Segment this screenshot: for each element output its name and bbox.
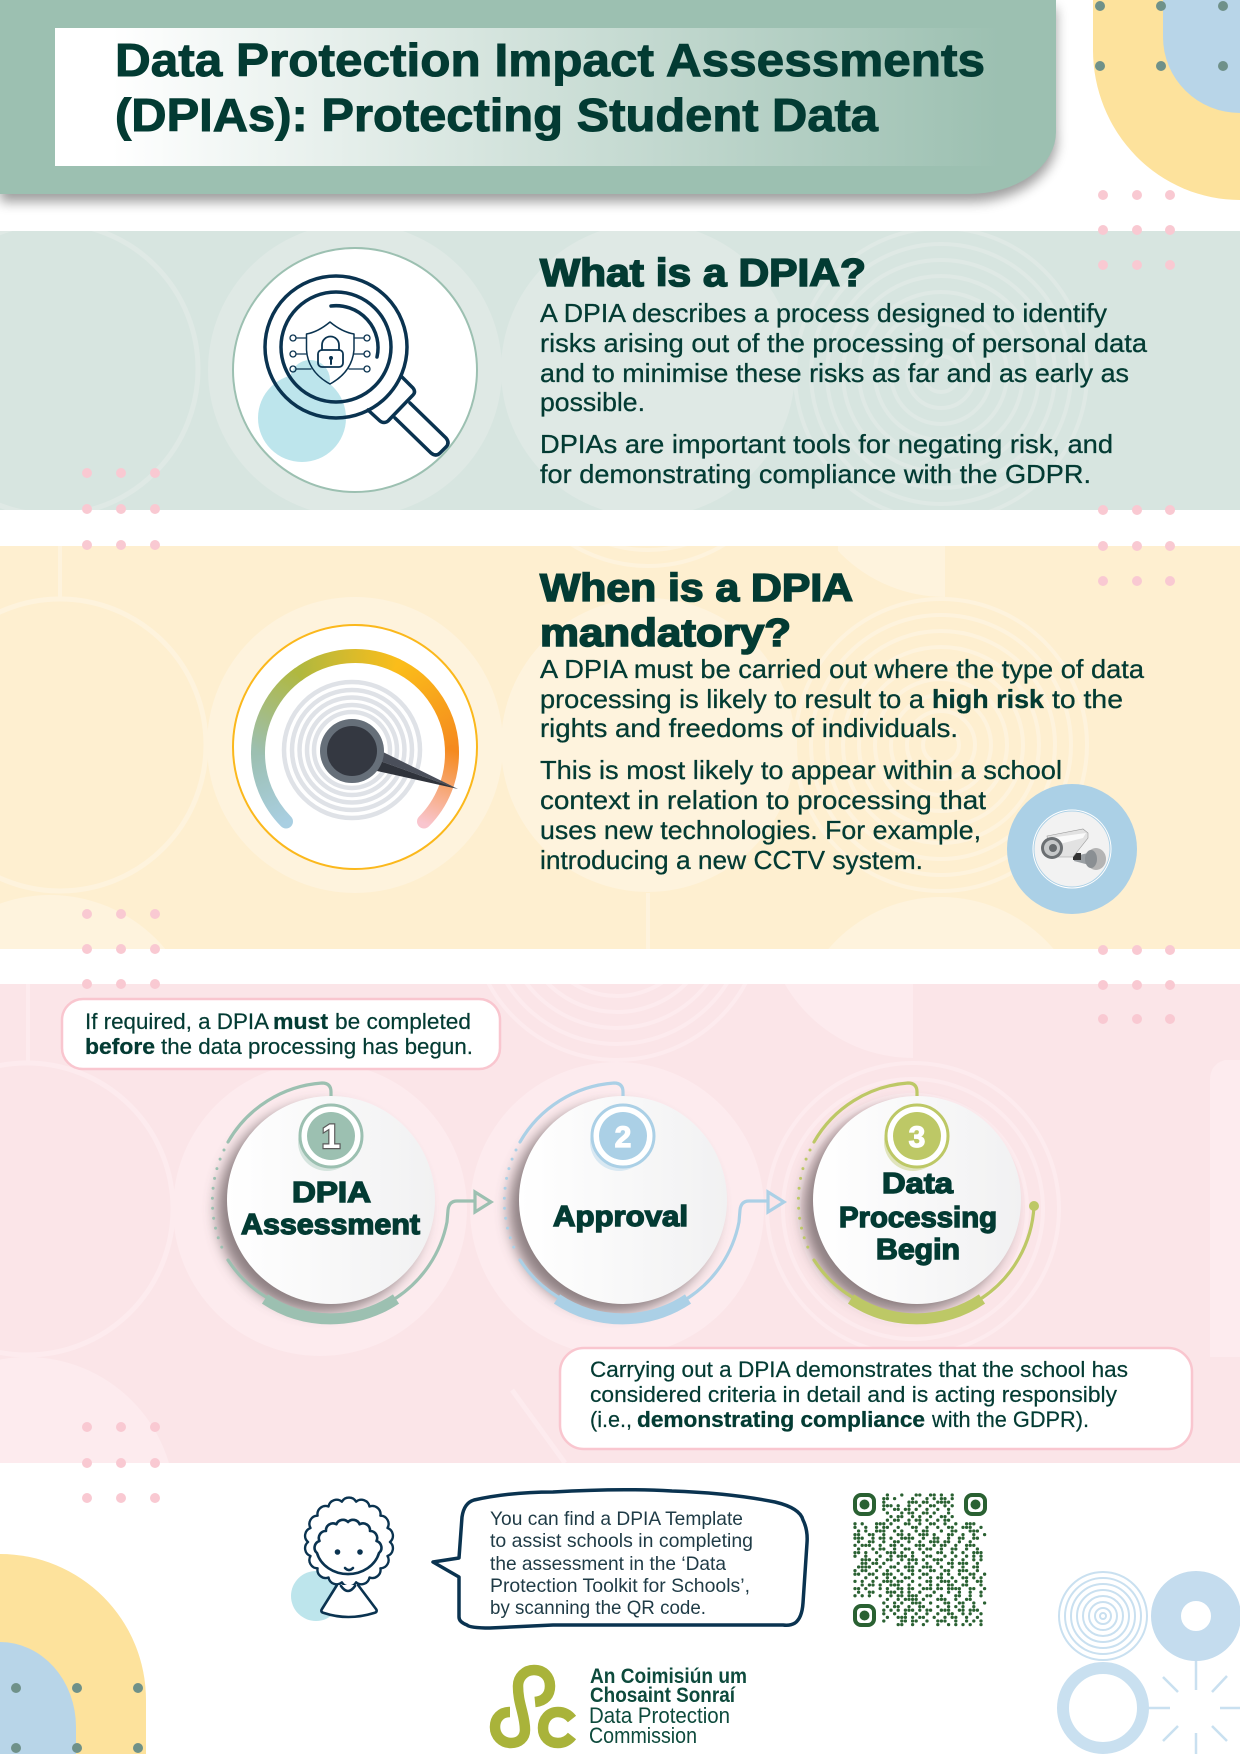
- logo text: Chosaint Sonraí: [590, 1684, 736, 1707]
- label: Approval: [553, 1201, 688, 1233]
- callout: demonstrating compliance: demonstrating compliance: [637, 1407, 925, 1432]
- logo text: [589, 1665, 747, 1748]
- label: DPIA: [292, 1177, 371, 1209]
- label: Processing: [839, 1202, 997, 1234]
- logo text: Commission: [589, 1723, 697, 1748]
- decoration: bottom right shapes: [1059, 1572, 1240, 1754]
- logo text: Data Protection: [589, 1703, 730, 1728]
- text block: when mandatory: high risk: [932, 684, 1045, 714]
- step 2: approval: [504, 1083, 784, 1319]
- decoration: pink dot grids: [82, 190, 1175, 1503]
- text block: when mandatory: processing is likely to result to a: [540, 684, 925, 714]
- text block: when mandatory: uses new technologies. For example,: [540, 815, 981, 845]
- callout: complete before processing: before: [85, 1034, 155, 1059]
- callout: complete before processing: [62, 999, 500, 1069]
- logo text: An Coimisiún um: [590, 1665, 747, 1688]
- step 1: DPIA assessment: [212, 1083, 491, 1319]
- text block: DPIA description: A DPIA describes a process designed to identify: [540, 298, 1107, 328]
- icon: risk gauge: [233, 625, 477, 869]
- callout: complete before processing: be completed: [335, 1009, 471, 1034]
- label: Data: [882, 1168, 954, 1200]
- step 3: data processing begin: [798, 1083, 1039, 1319]
- icon: magnifying glass with shield: [233, 248, 477, 492]
- decoration: bottom left shapes: [0, 1554, 146, 1754]
- text block: DPIA description: for demonstrating compliance with the GDPR.: [540, 459, 1091, 489]
- speech bubble: by scanning the QR code.: [490, 1597, 706, 1619]
- heading: when is a DPIA mandatory: mandatory?: [540, 612, 791, 655]
- callout: demonstrating compliance: considered criteria in detail and is acting responsibly: [590, 1382, 1117, 1407]
- label: [241, 1177, 420, 1241]
- number 3: 3: [909, 1121, 925, 1154]
- text block: when mandatory: A DPIA must be carried out where the type of data: [540, 654, 1145, 684]
- text block: when mandatory: context in relation to processing that: [540, 785, 987, 815]
- number 2: 2: [615, 1121, 631, 1154]
- text block: DPIA description: possible.: [540, 387, 645, 417]
- text block: when mandatory: This is most likely to appear within a school: [540, 755, 1062, 785]
- title: (DPIAs): Protecting Student Data: [115, 89, 878, 141]
- panel: process steps background: [0, 984, 1240, 1463]
- callout: demonstrating compliance: Carrying out a DPIA demonstrates that the school has: [590, 1357, 1128, 1382]
- title: Data Protection Impact Assessments: [115, 34, 985, 86]
- callout: demonstrating compliance: (i.e.,: [590, 1407, 632, 1432]
- speech bubble: You can find a DPIA Template: [490, 1508, 743, 1530]
- QR code: [855, 1495, 985, 1625]
- decoration: top right shapes: [1093, 0, 1240, 200]
- text block: DPIA description: risks arising out of the processing of personal data: [540, 328, 1148, 358]
- callout: complete before processing: must: [273, 1009, 329, 1034]
- title: [115, 34, 985, 141]
- text block: DPIA description: [540, 298, 1148, 489]
- label: Assessment: [241, 1209, 420, 1241]
- logo mark: [495, 1670, 572, 1743]
- label: Begin: [876, 1234, 960, 1266]
- speech bubble: to assist schools in completing: [490, 1530, 753, 1552]
- text block: when mandatory: rights and freedoms of individuals.: [540, 713, 958, 743]
- text block: when mandatory: to the: [1052, 684, 1123, 714]
- heading: when is a DPIA mandatory: [540, 567, 853, 655]
- text block: DPIA description: and to minimise these risks as far and as early as: [540, 358, 1129, 388]
- text block: when mandatory: [540, 654, 1145, 875]
- speech bubble: [433, 1490, 807, 1628]
- text block: when mandatory: introducing a new CCTV system.: [540, 845, 923, 875]
- icon: child character: [291, 1498, 393, 1621]
- panel: when is a DPIA mandatory background: [0, 546, 1240, 949]
- callout: demonstrating compliance: [560, 1348, 1192, 1449]
- heading: when is a DPIA mandatory: When is a DPIA: [540, 567, 853, 610]
- speech bubble: Protection Toolkit for Schools’,: [490, 1575, 750, 1597]
- panel: what is a DPIA background: [0, 223, 1240, 520]
- header banner: [0, 0, 1057, 202]
- callout: complete before processing: the data processing has begun.: [161, 1034, 473, 1059]
- callout: demonstrating compliance: with the GDPR).: [931, 1407, 1089, 1432]
- speech bubble: the assessment in the ‘Data: [490, 1553, 726, 1575]
- logo: Data Protection Commission: [495, 1665, 747, 1748]
- text block: DPIA description: DPIAs are important tools for negating risk, and: [540, 429, 1113, 459]
- number 1: 1: [322, 1118, 340, 1156]
- label: [839, 1168, 997, 1266]
- callout: complete before processing: If required, a DPIA: [85, 1009, 269, 1034]
- heading: what is a DPIA: What is a DPIA?: [540, 252, 866, 295]
- icon: CCTV camera: [1007, 784, 1137, 914]
